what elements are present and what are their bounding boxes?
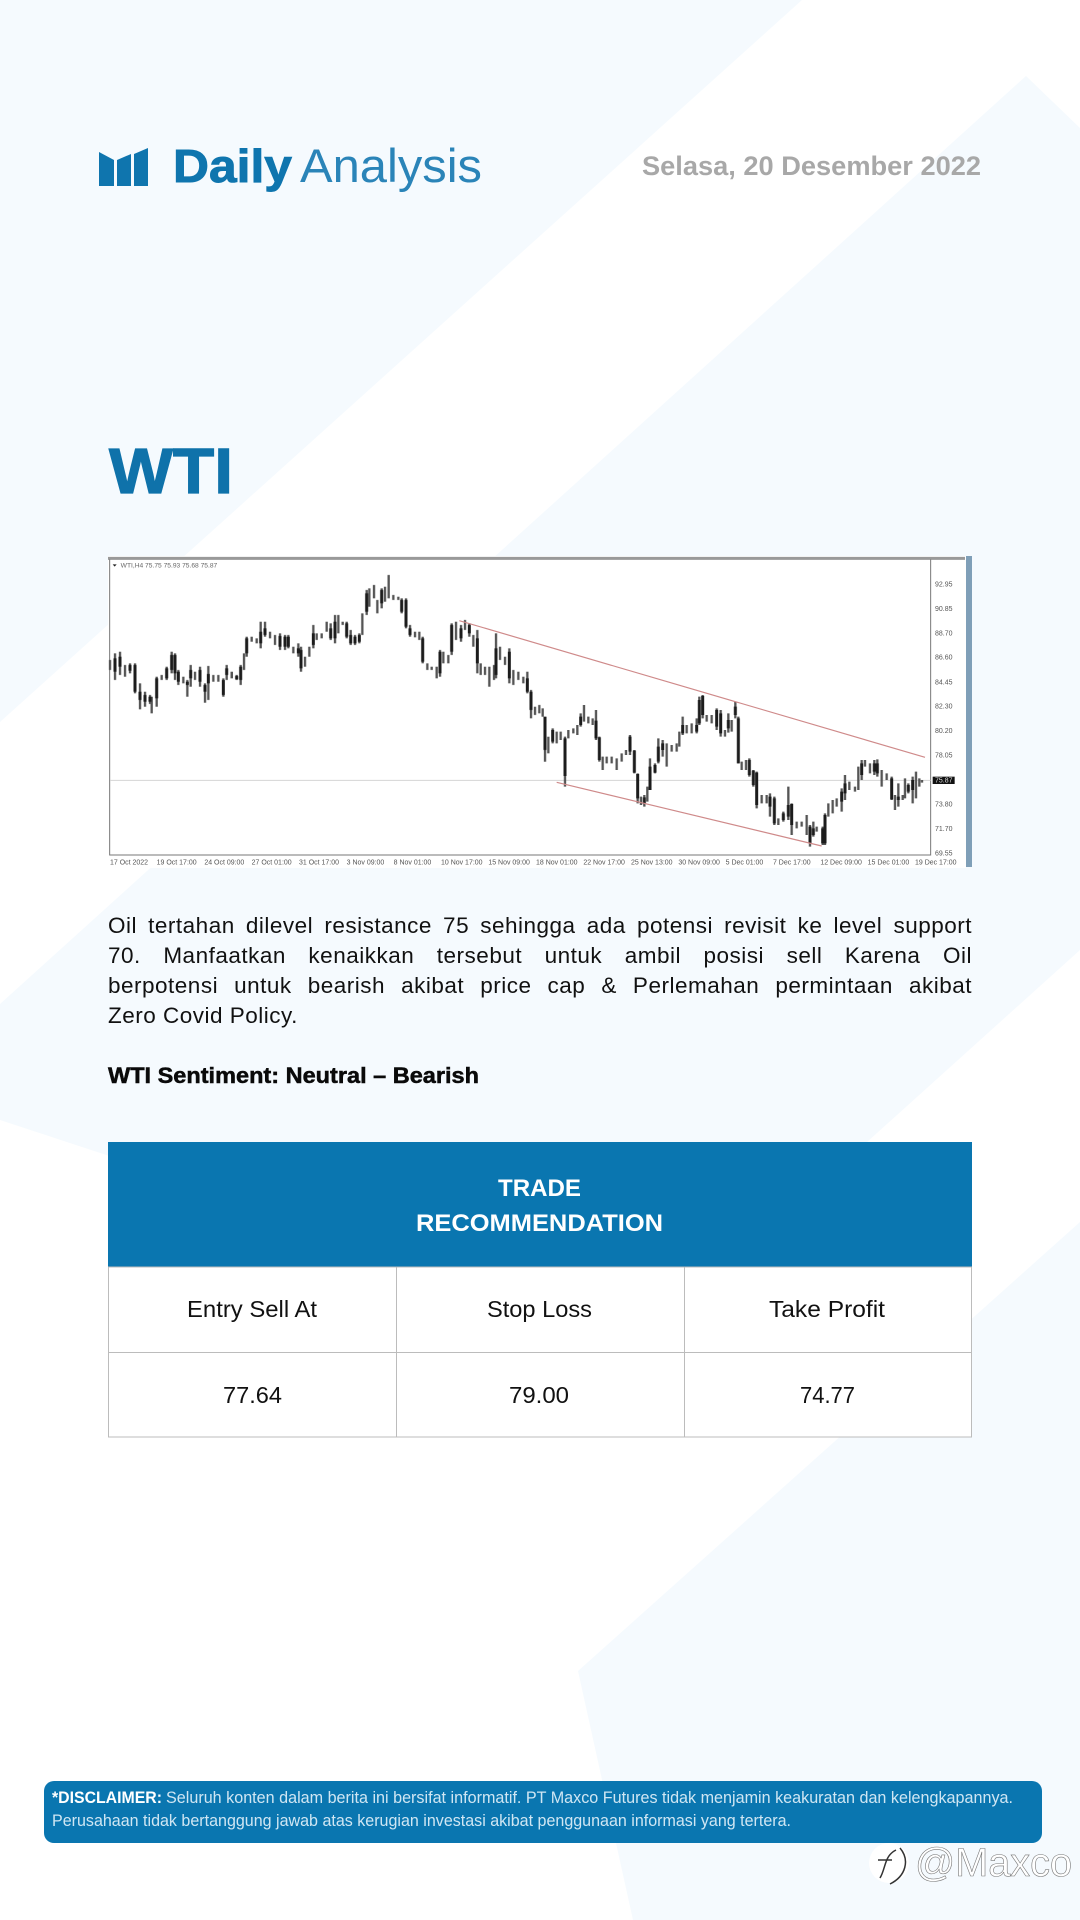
- price axis labels: 71.70: [935, 826, 953, 833]
- analysis paragraph: Oil tertahan dilevel resistance 75 sehingga ada potensi revisit ke level support: [108, 912, 972, 938]
- analysis paragraph: 70. Manfaatkan kenaikkan tersebut untuk ambil posisi sell Karena Oil: [108, 942, 972, 968]
- values: 77.64: [223, 1382, 282, 1408]
- price axis labels: 75.87: [935, 778, 953, 785]
- icon: bar chart logo: [99, 148, 148, 186]
- table: trade recommendation: [108, 1142, 972, 1437]
- date axis labels: 19 Oct 17:00: [157, 860, 197, 867]
- date axis labels: 10 Nov 17:00: [441, 860, 483, 867]
- analysis paragraph: Zero Covid Policy.: [108, 1002, 298, 1028]
- price axis labels: 78.05: [935, 753, 953, 760]
- column labels: Entry Sell At: [187, 1296, 318, 1322]
- column labels: Stop Loss: [487, 1296, 592, 1322]
- watermark: @Maxco: [915, 1841, 1072, 1885]
- date axis labels: 15 Dec 01:00: [868, 860, 909, 867]
- date axis labels: 30 Nov 09:00: [678, 860, 720, 867]
- title: WTI: WTI: [109, 435, 233, 507]
- sentiment line: WTI Sentiment: Neutral – Bearish: [108, 1063, 479, 1088]
- logo text: Daily: Daily: [173, 140, 292, 192]
- date axis labels: 18 Nov 01:00: [536, 860, 578, 867]
- date axis labels: 5 Dec 01:00: [726, 860, 763, 867]
- date axis labels: 27 Oct 01:00: [252, 860, 292, 867]
- price axis labels: 92.95: [935, 581, 953, 588]
- date axis labels: 7 Dec 17:00: [773, 860, 811, 867]
- date axis labels: 12 Dec 09:00: [820, 860, 862, 867]
- values: 74.77: [800, 1382, 855, 1408]
- logo text: Analysis: Analysis: [300, 139, 482, 192]
- analysis paragraph: [108, 912, 972, 1028]
- price axis labels: 84.45: [935, 679, 953, 686]
- price axis labels: 80.20: [935, 728, 953, 735]
- candlesticks: [110, 575, 922, 847]
- date axis labels: 3 Nov 09:00: [347, 860, 384, 867]
- panel: price chart: [108, 556, 972, 868]
- price axis labels: [933, 581, 955, 857]
- date axis labels: 31 Oct 17:00: [299, 860, 339, 867]
- trend channel upper line: [459, 621, 925, 757]
- date axis labels: 25 Nov 13:00: [631, 860, 673, 867]
- date axis labels: [110, 860, 957, 867]
- current price line: [110, 779, 931, 782]
- price axis labels: 69.55: [935, 850, 953, 857]
- date axis labels: 24 Oct 09:00: [204, 860, 244, 867]
- table grid: [108, 1267, 972, 1437]
- values: 79.00: [509, 1382, 569, 1408]
- date axis labels: 17 Oct 2022: [110, 860, 148, 867]
- price axis labels: 90.85: [935, 606, 953, 613]
- date axis labels: 15 Nov 09:00: [488, 860, 530, 867]
- column labels: Take Profit: [769, 1296, 886, 1322]
- price axis labels: 86.60: [935, 655, 953, 662]
- price axis labels: 73.80: [935, 801, 953, 808]
- trend channel lower line: [557, 782, 822, 846]
- disclaimer box: Seluruh konten dalam berita ini bersifat informatif. PT Maxco Futures tidak menjamin keakuratan dan kelengkapannya.: [166, 1788, 1013, 1807]
- chart frame: [108, 554, 965, 563]
- price axis labels: 82.30: [935, 704, 953, 711]
- disclaimer box: *DISCLAIMER:: [52, 1788, 162, 1807]
- date axis labels: 8 Nov 01:00: [394, 860, 431, 867]
- header: logo: [99, 139, 482, 192]
- date axis labels: 19 Dec 17:00: [915, 860, 957, 867]
- price axis labels: 88.70: [935, 630, 953, 637]
- column labels: [187, 1296, 886, 1322]
- disclaimer box: [44, 1781, 1042, 1843]
- table header: TRADE: [498, 1175, 581, 1202]
- disclaimer box: Perusahaan tidak bertanggung jawab atas kerugian investasi akibat penggunaan informasi yang tertera.: [52, 1811, 791, 1830]
- analysis paragraph: berpotensi untuk bearish akibat price cap & Perlemahan permintaan akibat: [108, 972, 972, 998]
- table header: RECOMMENDATION: [416, 1210, 663, 1237]
- date axis labels: 22 Nov 17:00: [583, 860, 625, 867]
- values: [223, 1382, 855, 1408]
- date: Selasa, 20 Desember 2022: [642, 151, 981, 181]
- table header: [108, 1142, 972, 1267]
- chart header label: WTI,H4 75.75 75.93 75.68 75.87: [121, 563, 218, 570]
